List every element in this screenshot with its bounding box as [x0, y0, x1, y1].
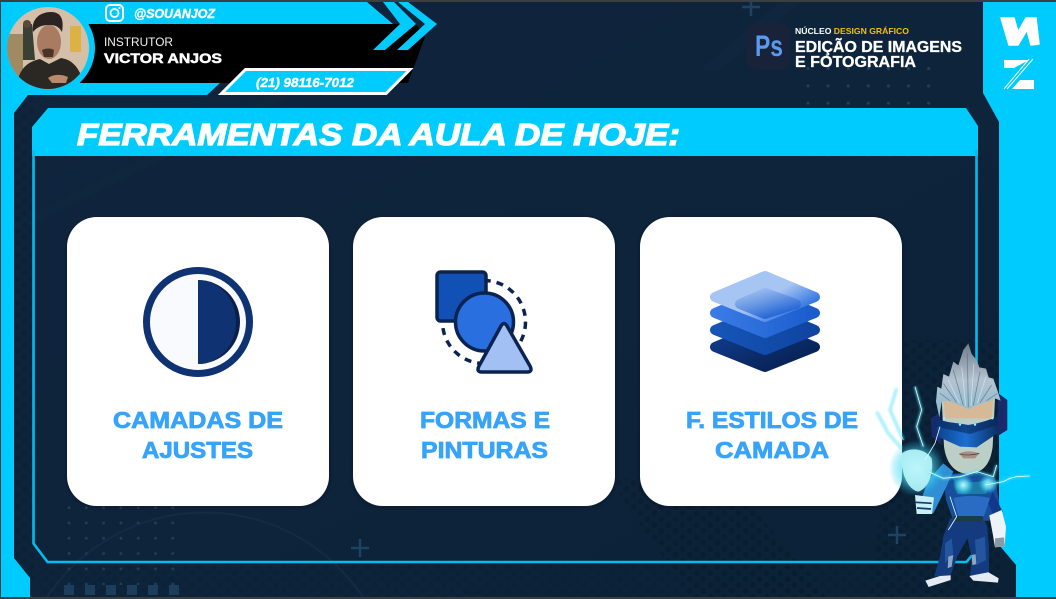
- card: camadas de ajustes: [67, 217, 329, 506]
- legs: [934, 517, 989, 578]
- instructor name: VICTOR ANJOS: [104, 50, 222, 66]
- torso: [943, 473, 999, 522]
- icon: instagram: [106, 5, 123, 21]
- left arm: [917, 463, 953, 513]
- panel: main frame and title band: [32, 108, 978, 562]
- card label: [686, 407, 858, 463]
- frame: right cyan band: [983, 2, 1056, 597]
- course heading: NÚCLEO DESIGN GRÁFICO: [795, 25, 909, 36]
- icon: layers: [715, 276, 815, 367]
- right arm: [988, 492, 1003, 517]
- instagram handle: @SOUANJOZ: [134, 7, 216, 21]
- character: lightning superhero mascot: [877, 343, 1030, 587]
- black ribbon: [80, 24, 425, 83]
- card label: CAMADA: [715, 437, 829, 463]
- card label: [113, 407, 283, 463]
- course heading: EDIÇÃO DE IMAGENS: [795, 38, 962, 56]
- course heading: [795, 25, 962, 71]
- icon: shapes: [437, 272, 531, 372]
- course heading: E FOTOGRAFIA: [795, 54, 916, 71]
- card label: CAMADAS DE: [113, 407, 283, 433]
- energy fist: [888, 440, 945, 497]
- card label: AJUSTES: [142, 437, 253, 463]
- phone badge: (21) 98116-7012: [256, 75, 355, 90]
- card label: PINTURAS: [421, 437, 548, 463]
- card: estilos de camada: [640, 217, 902, 506]
- card: formas e pinturas: [353, 217, 615, 506]
- icon: half circle adjustment: [146, 270, 250, 374]
- logo: VZ mark: [1001, 18, 1039, 89]
- instructor avatar: [7, 7, 95, 89]
- icon: photoshop: Ps: [755, 30, 783, 63]
- card label: FORMAS E: [420, 407, 550, 433]
- lightning bolts: [877, 387, 1030, 485]
- frame: left cyan band: [0, 2, 393, 597]
- card label: F. ESTILOS DE: [686, 407, 858, 433]
- instructor label: INSTRUTOR: [104, 37, 173, 49]
- head: [931, 393, 1007, 445]
- phone badge: [222, 70, 410, 94]
- title: FERRAMENTAS DA AULA DE HOJE:: [77, 117, 680, 152]
- chevrons: [373, 2, 437, 50]
- icon: photoshop: [747, 24, 790, 69]
- card label: [420, 407, 550, 463]
